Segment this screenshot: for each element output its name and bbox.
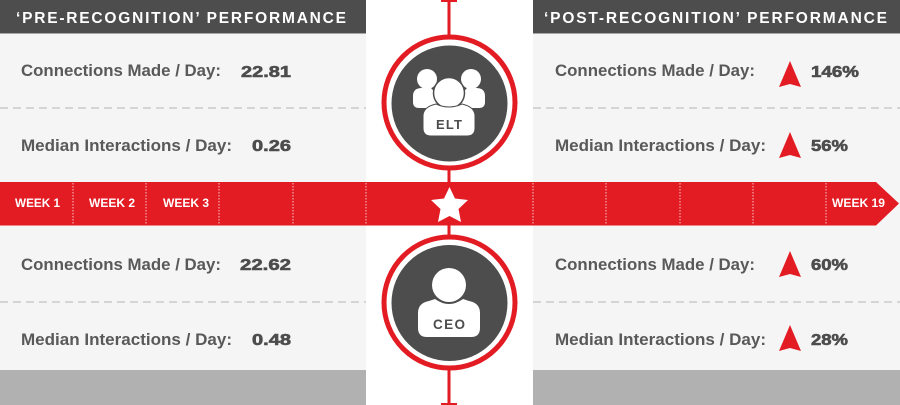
heading: pre-recognition (0, 0, 366, 34)
metric: CEO connections pre: Connections Made / Day: (21, 256, 221, 274)
timeline connector line (441, 0, 457, 405)
metric: ELT interactions pre: Median Interactions / Day: (21, 137, 232, 155)
metric: CEO connections post (555, 251, 848, 277)
metric: ELT interactions post: 56% (811, 138, 848, 155)
metric: ELT interactions post: Median Interactions / Day: (555, 137, 766, 155)
metric: CEO interactions post: Median Interactions / Day: (555, 331, 766, 349)
metric: CEO interactions post (555, 325, 848, 351)
icon: ELT badge: ELT (436, 117, 462, 132)
panel: post-recognition (533, 0, 900, 405)
metric: CEO connections pre: 22.62 (240, 257, 291, 274)
metric: ELT connections pre: 22.81 (241, 64, 291, 81)
timeline arrow band (0, 182, 899, 226)
metric: ELT connections post: Connections Made / Day: (555, 62, 755, 80)
week labels: WEEK 19 (832, 198, 885, 210)
icon: CEO badge: CEO (433, 317, 465, 332)
metric: ELT connections post (555, 61, 859, 87)
metric: CEO connections post: Connections Made / Day: (555, 256, 755, 274)
week labels: WEEK 3 (163, 198, 209, 210)
icon: star (431, 187, 468, 222)
icon: ELT badge (384, 37, 515, 168)
heading: post-recognition (533, 0, 900, 34)
metric: ELT connections pre: Connections Made / Day: (21, 62, 221, 80)
metric: CEO interactions post: 28% (811, 332, 848, 349)
metric: ELT connections pre (21, 62, 291, 81)
icon: CEO badge (384, 237, 515, 368)
week labels: WEEK 1 (15, 198, 61, 210)
heading: pre-recognition: ‘PRE-RECOGNITION’ PERFORMANCE (16, 10, 346, 27)
metric: ELT interactions pre: 0.26 (252, 138, 291, 155)
week labels (15, 198, 885, 210)
metric: CEO connections post: 60% (811, 257, 848, 274)
week labels: WEEK 2 (89, 198, 135, 210)
metric: CEO interactions pre: Median Interactions / Day: (21, 331, 232, 349)
panel: pre-recognition (0, 0, 366, 405)
heading: post-recognition: ‘POST-RECOGNITION’ PERFORMANCE (544, 10, 887, 27)
metric: CEO interactions pre: 0.48 (252, 332, 291, 349)
metric: ELT interactions post (555, 132, 848, 158)
metric: ELT connections post: 146% (811, 64, 859, 81)
